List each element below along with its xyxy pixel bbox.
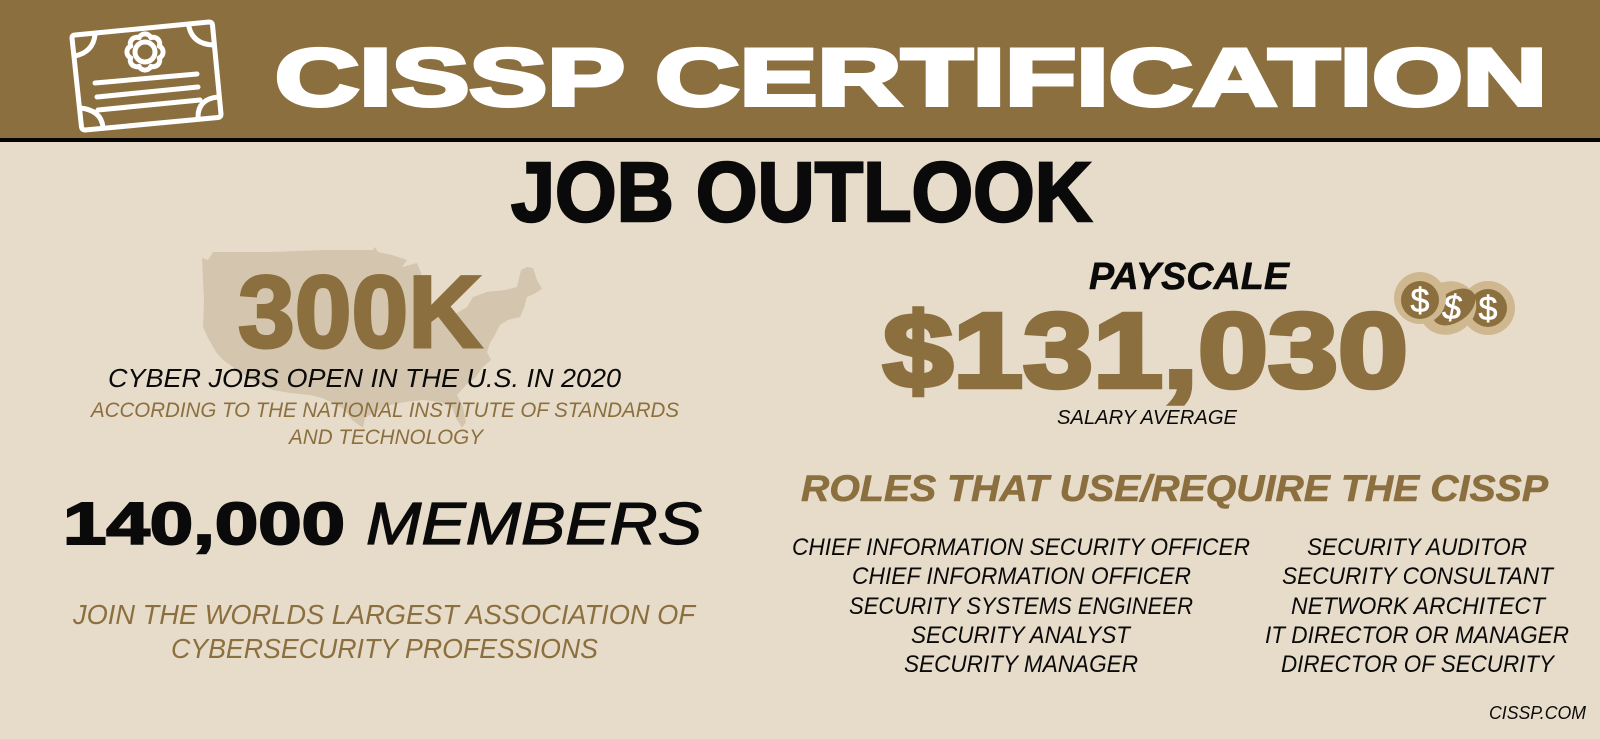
list: roles column one: SECURITY ANALYST: [911, 622, 1132, 649]
stat: 140,000 members: 140,000: [63, 491, 345, 557]
list: roles column one: CHIEF INFORMATION OFFICER: [852, 563, 1191, 590]
list: roles column two: DIRECTOR OF SECURITY: [1281, 651, 1556, 678]
icon: coins: $: [1479, 290, 1498, 328]
text: join association: CYBERSECURITY PROFESSIONS: [171, 633, 598, 664]
map: United States silhouette: [202, 247, 542, 428]
title: CISSP CERTIFICATION: [275, 33, 1547, 123]
caption: salary average: SALARY AVERAGE: [1057, 407, 1238, 429]
text: source attribution: ACCORDING TO THE NATIONAL INSTITUTE OF STANDARDS: [89, 399, 679, 422]
list: roles column two: SECURITY CONSULTANT: [1282, 563, 1555, 590]
text: source attribution: [89, 399, 679, 449]
header banner: [0, 0, 1600, 142]
heading: payscale: PAYSCALE: [1089, 256, 1291, 298]
list: roles column two: NETWORK ARCHITECT: [1291, 593, 1547, 620]
icon: coins: $: [1411, 282, 1430, 320]
list: roles column two: SECURITY AUDITOR: [1307, 534, 1527, 561]
list: roles column two: IT DIRECTOR OR MANAGER: [1265, 622, 1569, 649]
stat: 140,000 members: MEMBERS: [366, 491, 702, 557]
text: join association: [72, 599, 697, 664]
icon: certificate: [72, 22, 221, 130]
stat: 300K: 300K: [238, 255, 482, 369]
icon: coins: $: [1442, 289, 1463, 327]
list: roles column one: CHIEF INFORMATION SECURITY OFFICER: [792, 534, 1250, 561]
icon: coins: [1394, 271, 1515, 345]
stat: 140,000 members: [63, 491, 702, 557]
list: roles column one: SECURITY MANAGER: [904, 651, 1138, 678]
list: roles column one: [792, 534, 1250, 678]
subtitle: job outlook: JOB OUTLOOK: [511, 145, 1092, 239]
text: cyber jobs open: CYBER JOBS OPEN IN THE U.S. IN 2020: [108, 363, 622, 393]
text: source attribution: AND TECHNOLOGY: [287, 426, 485, 449]
list: roles column two: [1265, 534, 1569, 678]
text: join association: JOIN THE WORLDS LARGEST ASSOCIATION OF: [72, 599, 697, 630]
stat: salary: $131,030: [883, 292, 1408, 410]
list: roles column one: SECURITY SYSTEMS ENGINEER: [849, 593, 1193, 620]
heading: roles: ROLES THAT USE/REQUIRE THE CISSP: [801, 468, 1548, 509]
source: cissp.com: CISSP.COM: [1489, 703, 1586, 723]
